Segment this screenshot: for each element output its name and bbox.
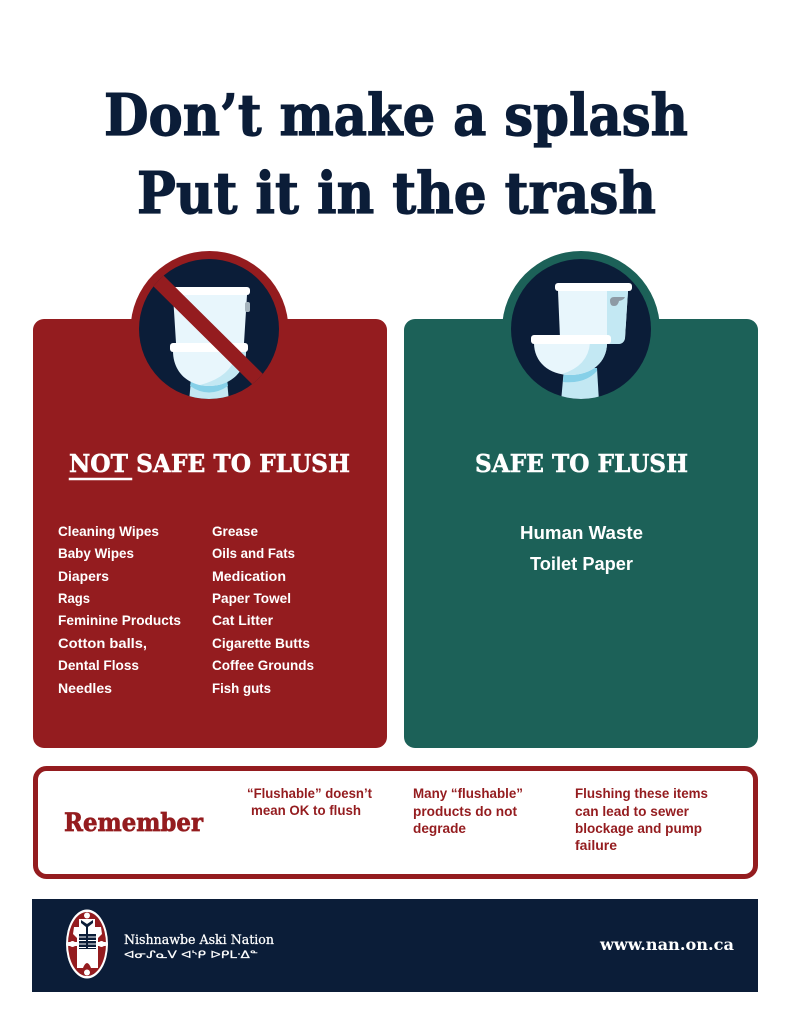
text: point three: Flushing these items xyxy=(575,785,708,801)
text: point three: can lead to sewer xyxy=(575,803,690,819)
list: right column: Cigarette Butts xyxy=(212,635,310,651)
text: point two xyxy=(413,785,523,836)
list: right column: Paper Towel xyxy=(212,590,291,606)
list: left column xyxy=(58,523,181,696)
text: point two: Many “flushable” xyxy=(413,785,523,801)
list: left column: Baby Wipes xyxy=(58,545,134,561)
heading: not safe to flush: NOT SAFE TO FLUSH xyxy=(69,449,350,478)
text: point one: “Flushable” doesn’t xyxy=(247,785,372,801)
list: safe items: Toilet Paper xyxy=(530,554,633,574)
text: point two: degrade xyxy=(413,820,466,836)
list: left column: Cleaning Wipes xyxy=(58,523,159,539)
footer xyxy=(32,899,758,992)
panel: remember xyxy=(36,768,756,876)
text: point three: blockage and pump xyxy=(575,820,702,836)
list: right column: Fish guts xyxy=(212,680,271,696)
list: right column xyxy=(212,523,314,696)
text: point three xyxy=(575,785,708,853)
text: organisation name: Nishnawbe Aski Nation xyxy=(124,933,275,948)
icon: toilet xyxy=(511,259,651,402)
list: left column: Rags xyxy=(58,590,90,606)
title: Put it in the trash xyxy=(137,160,656,227)
list: right column: Medication xyxy=(212,568,286,584)
text: point one: mean OK to flush xyxy=(251,802,361,818)
panel: safe to flush xyxy=(404,251,758,748)
list: right column: Grease xyxy=(212,523,258,539)
heading: remember: Remember xyxy=(64,808,204,837)
list: safe items xyxy=(520,523,643,574)
list: left column: Feminine Products xyxy=(58,612,181,628)
icon: crossed-out toilet xyxy=(139,259,279,402)
text: point three: failure xyxy=(575,837,617,853)
text: syllabics name: ᐊᓂᔑᓇᐯ ᐊᔅᑭ ᐅᑭᒪᐧᐃᓐ xyxy=(124,950,258,961)
title: Don’t make a splash xyxy=(104,82,688,149)
list: left column: Diapers xyxy=(58,568,109,584)
text: point two: products do not xyxy=(413,803,517,819)
title xyxy=(104,82,688,227)
list: right column: Cat Litter xyxy=(212,612,274,628)
list: left column: Needles xyxy=(58,680,112,696)
list: left column: Dental Floss xyxy=(58,657,139,673)
list: safe items: Human Waste xyxy=(520,523,643,543)
text: website: www.nan.on.ca xyxy=(599,935,734,954)
icon: nation logo xyxy=(66,910,108,978)
panel: not safe to flush xyxy=(33,251,387,748)
list: right column: Oils and Fats xyxy=(212,545,295,561)
heading: safe to flush: SAFE TO FLUSH xyxy=(475,449,688,478)
text: point one xyxy=(247,785,372,818)
list: left column: Cotton balls, xyxy=(58,635,147,651)
list: right column: Coffee Grounds xyxy=(212,657,314,673)
